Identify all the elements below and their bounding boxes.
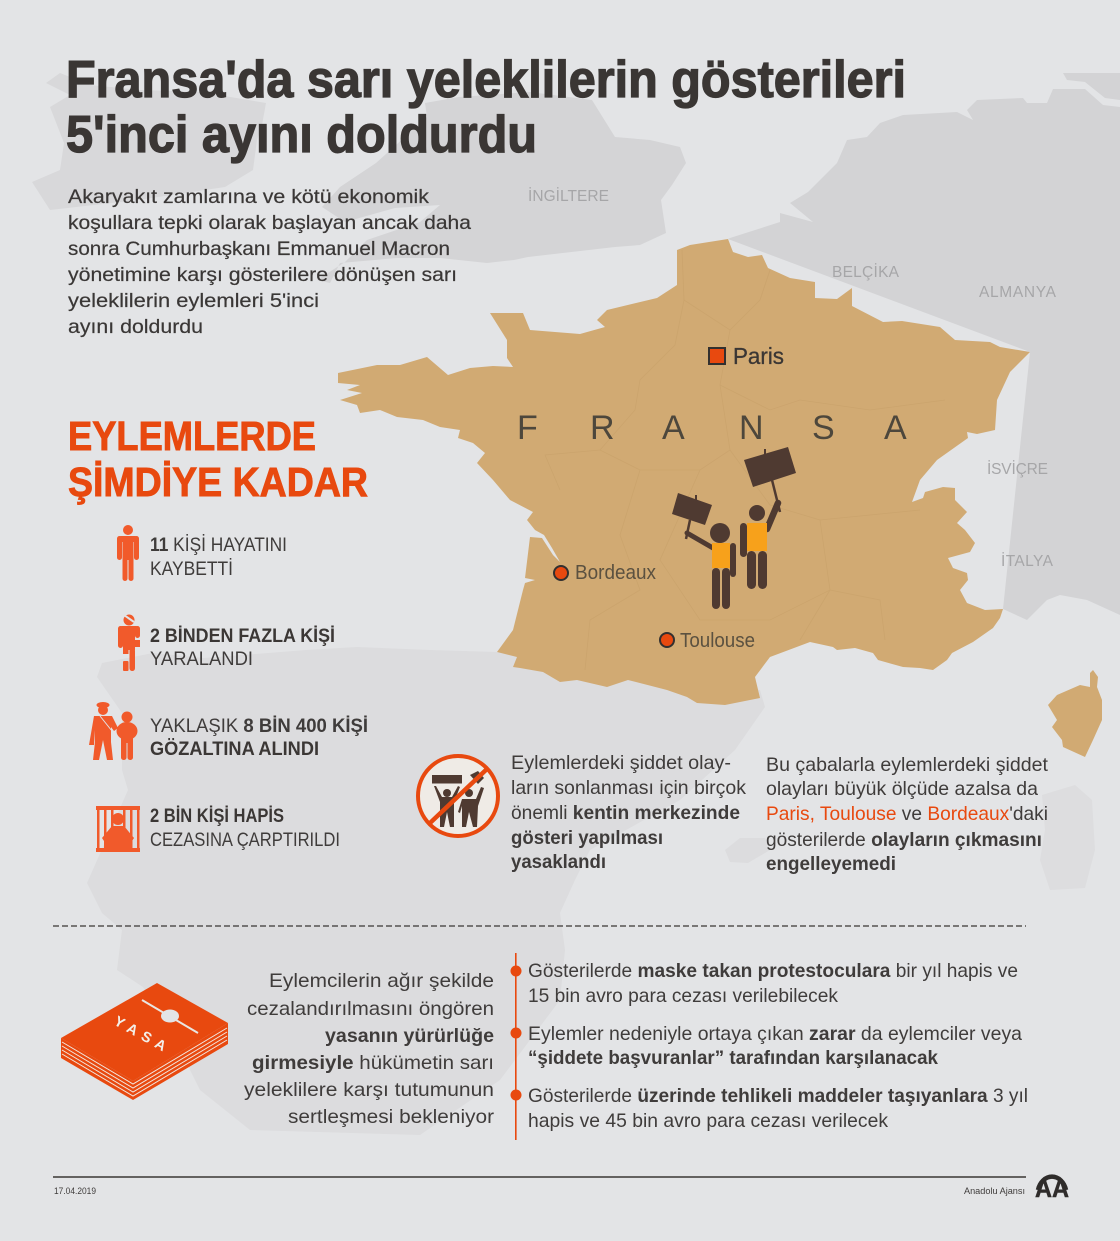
bullet: dangerous materials: Gösterilerde üzerinde tehlikeli maddeler taşıyanlara 3 yıl bbox=[528, 1085, 1028, 1107]
text: city centre ban: yasaklandı bbox=[511, 851, 606, 873]
bullet: damages: Eylemler nedeniyle ortaya çıkan zarar da eylemciler veya bbox=[528, 1023, 1022, 1045]
bullet: masks bbox=[528, 960, 1018, 1007]
intro text: sonra Cumhurbaşkanı Emmanuel Macron bbox=[68, 238, 450, 260]
bullet: dangerous materials: hapis ve 45 bin avro para cezası verilecek bbox=[528, 1110, 888, 1132]
map country labels: İNGİLTERE bbox=[528, 187, 609, 205]
stat: deaths bbox=[117, 525, 287, 581]
map: Balearic islands bbox=[725, 838, 770, 863]
text: law summary: Eylemcilerin ağır şekilde bbox=[269, 970, 494, 992]
text: law summary: cezalandırılmasını öngören bbox=[247, 998, 494, 1020]
intro text: yönetimine karşı gösterilere dönüşen sarı bbox=[68, 264, 457, 286]
text: violence continued: engelleyemedi bbox=[766, 853, 896, 875]
text: violence continued: gösterilerde olayların çıkmasını bbox=[766, 829, 1042, 851]
text: city centre ban: Eylemlerdeki şiddet olay- bbox=[511, 752, 731, 774]
intro text: koşullara tepki olarak başlayan ancak daha bbox=[68, 212, 471, 234]
map: France bbox=[338, 239, 1030, 705]
stat: imprisoned: CEZASINA ÇARPTIRILDI bbox=[150, 830, 340, 851]
map: Denmark bbox=[1063, 73, 1120, 100]
city: Paris bbox=[709, 343, 784, 369]
bullet: masks: 15 bin avro para cezası verilebilecek bbox=[528, 985, 838, 1007]
text: violence continued: Bu çabalarla eylemlerdeki şiddet bbox=[766, 754, 1049, 776]
stat: imprisoned: 2 BİN KİŞİ HAPİS bbox=[150, 806, 284, 827]
icon: protesters with signs bbox=[672, 447, 796, 609]
bullet: damages bbox=[528, 1023, 1022, 1069]
icon: person bbox=[117, 525, 139, 581]
stat: deaths: 11 KİŞİ HAYATINI bbox=[150, 535, 287, 556]
map country labels: BELÇİKA bbox=[832, 263, 900, 281]
map: Sardinia bbox=[1040, 785, 1095, 890]
intro text bbox=[68, 186, 471, 338]
stat: detained: GÖZALTINA ALINDI bbox=[150, 739, 319, 760]
bullet: dangerous materials bbox=[528, 1085, 1028, 1132]
title: Fransa'da sarı yeleklilerin gösterileri bbox=[66, 51, 906, 109]
footer source: Anadolu Ajansı bbox=[964, 1186, 1025, 1196]
stat: detained bbox=[89, 702, 368, 760]
map: Britain bbox=[317, 92, 686, 283]
text: law summary bbox=[244, 970, 495, 1128]
city: Paris: Paris bbox=[733, 343, 784, 369]
stat: deaths: KAYBETTİ bbox=[150, 559, 233, 580]
stat: injured: 2 BİNDEN FAZLA KİŞİ bbox=[150, 626, 335, 647]
intro text: ayını doldurdu bbox=[68, 316, 203, 338]
map: Corsica bbox=[1048, 670, 1102, 757]
icon: law book bbox=[61, 983, 228, 1100]
map country labels: ALMANYA bbox=[979, 284, 1057, 301]
heading bbox=[68, 413, 368, 505]
text: law summary: girmesiyle hükümetin sarı bbox=[252, 1052, 494, 1074]
icon: law book: YASA bbox=[111, 1014, 174, 1058]
logo: Anadolu Ajansı: AA bbox=[1035, 1175, 1069, 1203]
title bbox=[66, 51, 906, 164]
map: Ireland bbox=[32, 73, 266, 210]
text: violence continued: Paris, Toulouse ve Bordeaux'daki bbox=[766, 803, 1048, 825]
title: 5'inci ayını doldurdu bbox=[66, 106, 537, 164]
text: city centre ban: gösteri yapılması bbox=[511, 827, 663, 849]
intro text: Akaryakıt zamlarına ve kötü ekonomik bbox=[68, 186, 429, 208]
text: city centre ban: önemli kentin merkezinde bbox=[511, 802, 740, 824]
footer date: 17.04.2019 bbox=[54, 1186, 96, 1196]
text: violence continued: olayları büyük ölçüde azalsa da bbox=[766, 778, 1038, 800]
text: city centre ban bbox=[511, 752, 746, 873]
city: Bordeaux: Bordeaux bbox=[575, 562, 656, 584]
icon: protest prohibited bbox=[418, 756, 498, 836]
text: law summary: yasanın yürürlüğe bbox=[325, 1025, 494, 1047]
map country labels: İTALYA bbox=[1001, 552, 1054, 570]
map: Iberian peninsula bbox=[87, 647, 765, 1135]
map: northern Europe bbox=[728, 89, 1120, 620]
intro text: yeleklilerin eylemleri 5'inci bbox=[68, 290, 319, 312]
icon: officer and detainee bbox=[89, 702, 138, 760]
map country labels bbox=[528, 187, 1057, 570]
stat: injured bbox=[118, 614, 335, 671]
icon: injured person bbox=[118, 614, 140, 671]
timeline rule with bullets bbox=[510, 953, 522, 1140]
map country labels: İSVİÇRE bbox=[987, 460, 1048, 478]
map label: FRANSA: FRANSA bbox=[517, 409, 907, 447]
heading: ŞİMDİYE KADAR bbox=[68, 459, 368, 505]
city: Toulouse: Toulouse bbox=[680, 630, 755, 652]
bullet: damages: “şiddete başvuranlar” tarafından karşılanacak bbox=[528, 1047, 938, 1069]
text: violence continued bbox=[766, 754, 1049, 875]
icon: prisoner behind bars bbox=[96, 806, 140, 852]
heading: EYLEMLERDE bbox=[68, 413, 316, 459]
text: city centre ban: ların sonlanması için birçok bbox=[511, 777, 746, 799]
text: law summary: sertleşmesi bekleniyor bbox=[288, 1106, 495, 1128]
text: law summary: yeleklilere karşı tutumunun bbox=[244, 1079, 494, 1101]
stat: imprisoned bbox=[96, 806, 340, 852]
stat: injured: YARALANDI bbox=[150, 649, 253, 670]
bullet: masks: Gösterilerde maske takan protestoculara bir yıl hapis ve bbox=[528, 960, 1018, 982]
stat: detained: YAKLAŞIK 8 BİN 400 KİŞİ bbox=[150, 716, 368, 737]
